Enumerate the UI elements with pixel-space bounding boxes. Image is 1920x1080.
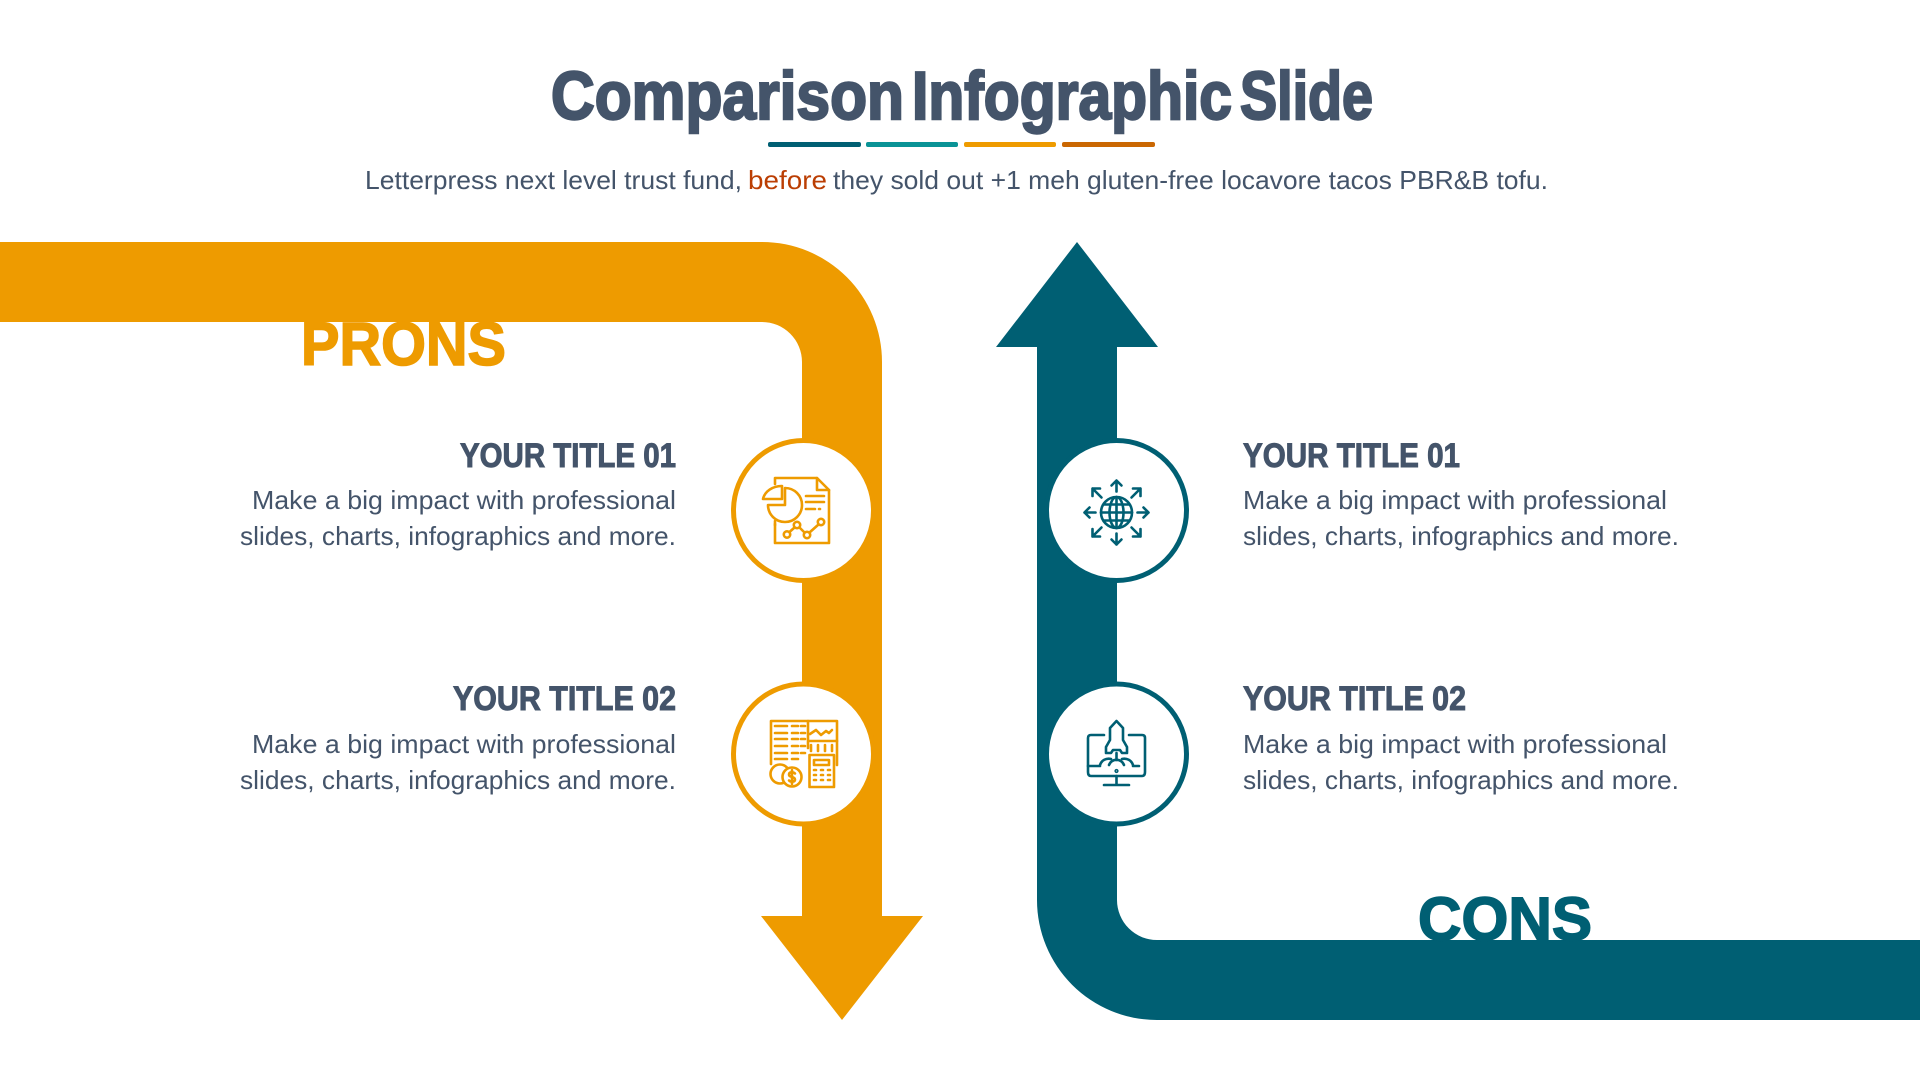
pros item 1 text: Make a big impact with professional	[252, 485, 676, 515]
cons item 1 text: slides, charts, infographics and more.	[1243, 521, 1679, 551]
cons item 1 text: Make a big impact with professional	[1243, 485, 1667, 515]
cons item 2 text: Make a big impact with professional	[1243, 729, 1667, 759]
subtitle: before	[748, 165, 827, 195]
pros item 2 text: Make a big impact with professional	[252, 729, 676, 759]
icon: rocket launching from monitor	[1046, 684, 1186, 824]
heading: pros: PRONS	[301, 310, 506, 378]
arrow: pros orange, pointing down	[0, 242, 923, 1020]
title underline bars	[768, 142, 1155, 147]
heading: cons: CONS	[1418, 885, 1592, 953]
pros item 2 text: slides, charts, infographics and more.	[240, 765, 676, 795]
arrow: cons teal, pointing up	[996, 242, 1920, 1020]
pros item 1 text	[240, 437, 676, 551]
icon: globe with radiating arrows	[1046, 440, 1186, 580]
pros item 2 text: YOUR TITLE 02	[453, 680, 676, 718]
pros item 1 text: slides, charts, infographics and more.	[240, 521, 676, 551]
subtitle	[365, 165, 1548, 195]
title: Infographic	[912, 58, 1232, 134]
cons item 2 text: slides, charts, infographics and more.	[1243, 765, 1679, 795]
subtitle: they sold out +1 meh gluten-free locavore tacos PBR&B tofu.	[833, 165, 1548, 195]
title	[551, 58, 1373, 134]
cons item 2 text: YOUR TITLE 02	[1243, 680, 1466, 718]
cons item 1 text: YOUR TITLE 01	[1243, 437, 1460, 475]
pros item 1 text: YOUR TITLE 01	[460, 437, 676, 475]
icon: spreadsheet, calculator and coins	[734, 684, 874, 824]
cons item 1 text	[1243, 437, 1679, 551]
title: Comparison	[551, 58, 904, 134]
cons item 2 text	[1243, 680, 1679, 795]
title: Slide	[1240, 58, 1373, 134]
icon: report with pie chart	[734, 440, 874, 580]
subtitle: Letterpress next level trust fund,	[365, 165, 742, 195]
pros item 2 text	[240, 680, 676, 795]
